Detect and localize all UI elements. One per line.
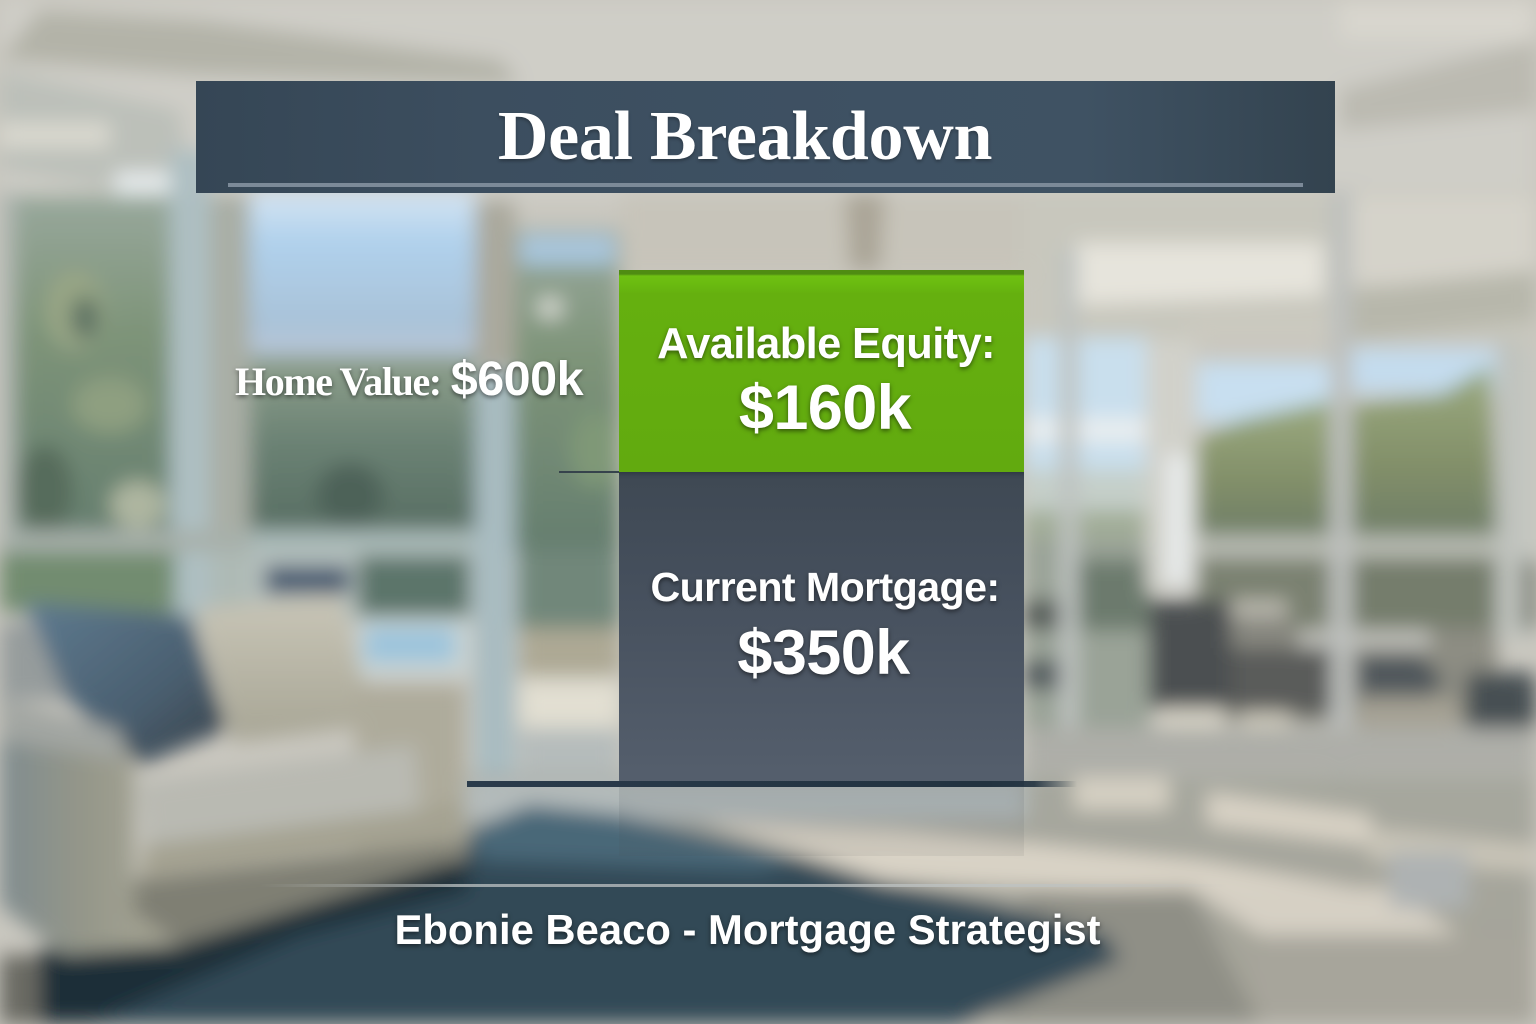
- mortgage value: $350k: [737, 618, 910, 688]
- right of middle window: [515, 230, 620, 550]
- upper-left light patches: [0, 122, 110, 148]
- segment: current mortgage: [619, 472, 1024, 786]
- footer divider: [260, 884, 1230, 887]
- home value leader line: [559, 471, 619, 473]
- center ceiling: [620, 193, 1024, 273]
- title banner: [196, 81, 1335, 193]
- lower left band: [0, 530, 250, 552]
- right windows: [1024, 338, 1149, 543]
- sill: [1024, 728, 1536, 773]
- floor: [466, 775, 1536, 1024]
- rug: [40, 805, 1120, 1024]
- mortgage label: Current Mortgage:: [650, 564, 1000, 610]
- left window trees: [15, 195, 170, 535]
- lower panes: [1024, 538, 1149, 728]
- banner underline: [228, 183, 1303, 186]
- segment: available equity: [619, 270, 1024, 472]
- armchair back: [0, 620, 70, 700]
- middle window: [250, 192, 475, 357]
- equity value: $160k: [739, 373, 911, 443]
- title: Deal Breakdown: [498, 98, 992, 175]
- right posts: [1060, 248, 1078, 728]
- bar reflection: [619, 786, 1024, 856]
- right ceiling: [1024, 190, 1536, 340]
- baseline: [467, 781, 1077, 787]
- home value label: Home Value:$600k: [235, 352, 583, 406]
- stacked bar: [619, 270, 1024, 856]
- patio furniture: [1149, 600, 1231, 708]
- ceiling: [0, 0, 1536, 200]
- arm and body: [0, 699, 180, 955]
- left frames: [170, 150, 210, 630]
- equity label: Available Equity:: [657, 320, 995, 368]
- footer credit: Ebonie Beaco - Mortgage Strategist: [394, 906, 1101, 953]
